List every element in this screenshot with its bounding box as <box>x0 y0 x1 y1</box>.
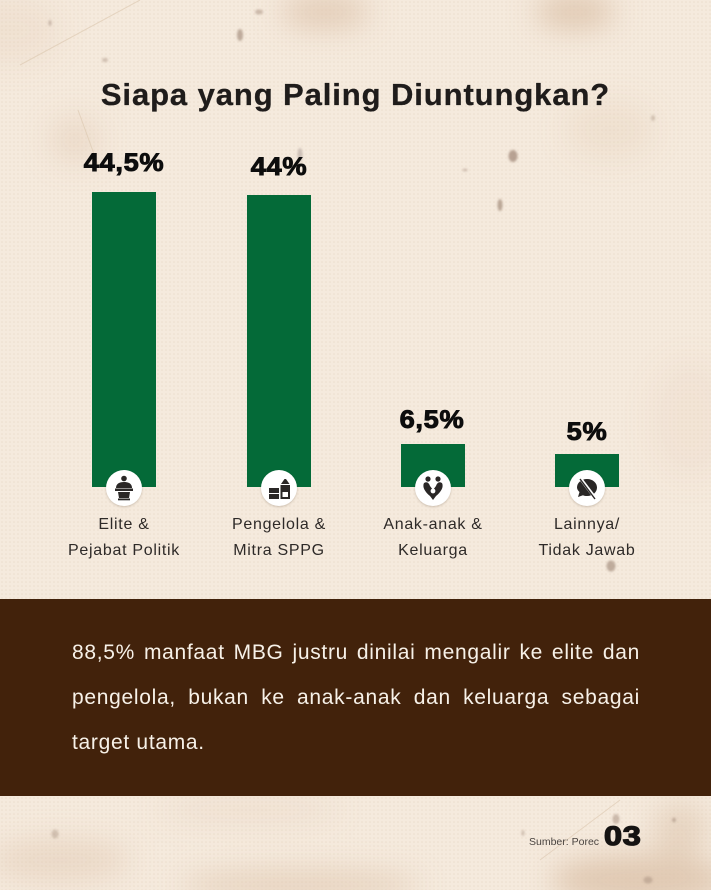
label: Pengelola & Mitra SPPG: Pengelola & <box>232 516 326 533</box>
bar chart <box>68 149 635 558</box>
bar: Anak-anak & Keluarga <box>401 444 465 487</box>
label: Pengelola & Mitra SPPG <box>232 516 326 558</box>
label: Elite & Pejabat Politik: Pejabat Politik <box>68 542 180 558</box>
label: Anak-anak & Keluarga: Anak-anak & <box>383 516 483 533</box>
panel: conclusion <box>0 599 711 796</box>
icon: muted speech bubble <box>569 470 605 506</box>
label: Anak-anak & Keluarga: Keluarga <box>398 542 468 558</box>
label: Lainnya / Tidak Jawab: Tidak Jawab <box>539 542 635 558</box>
icon: kitchen <box>261 470 297 506</box>
bar: Elite & Pejabat Politik <box>92 192 156 487</box>
label: Elite & Pejabat Politik: Elite & <box>98 516 150 533</box>
title: Siapa yang Paling Diuntungkan? <box>101 77 610 112</box>
conclusion text: pengelola, bukan ke anak-anak dan keluarga sebagai <box>72 686 640 709</box>
value: 5%: 5% <box>567 418 607 446</box>
icon: podium speaker <box>106 470 142 506</box>
label: Lainnya / Tidak Jawab <box>538 516 635 558</box>
label: Lainnya / Tidak Jawab: Lainnya/ <box>554 516 620 533</box>
value: 44%: 44% <box>251 153 307 181</box>
label: Anak-anak & Keluarga <box>383 516 483 558</box>
bar: Lainnya / Tidak Jawab <box>555 454 619 487</box>
conclusion text: 88,5% manfaat MBG justru dinilai mengalir ke elite dan <box>72 641 640 664</box>
page number: 03 <box>604 821 641 851</box>
conclusion text: target utama. <box>72 731 205 754</box>
bar: Pengelola & Mitra SPPG <box>247 195 311 487</box>
value: 44,5%: 44,5% <box>84 149 164 177</box>
label: Pengelola & Mitra SPPG: Mitra SPPG <box>233 542 325 558</box>
icon: family <box>415 470 451 506</box>
value: 6,5%: 6,5% <box>400 406 464 434</box>
source: Sumber: Porec <box>529 836 599 848</box>
conclusion text <box>72 641 640 754</box>
label: Elite & Pejabat Politik <box>68 516 180 558</box>
